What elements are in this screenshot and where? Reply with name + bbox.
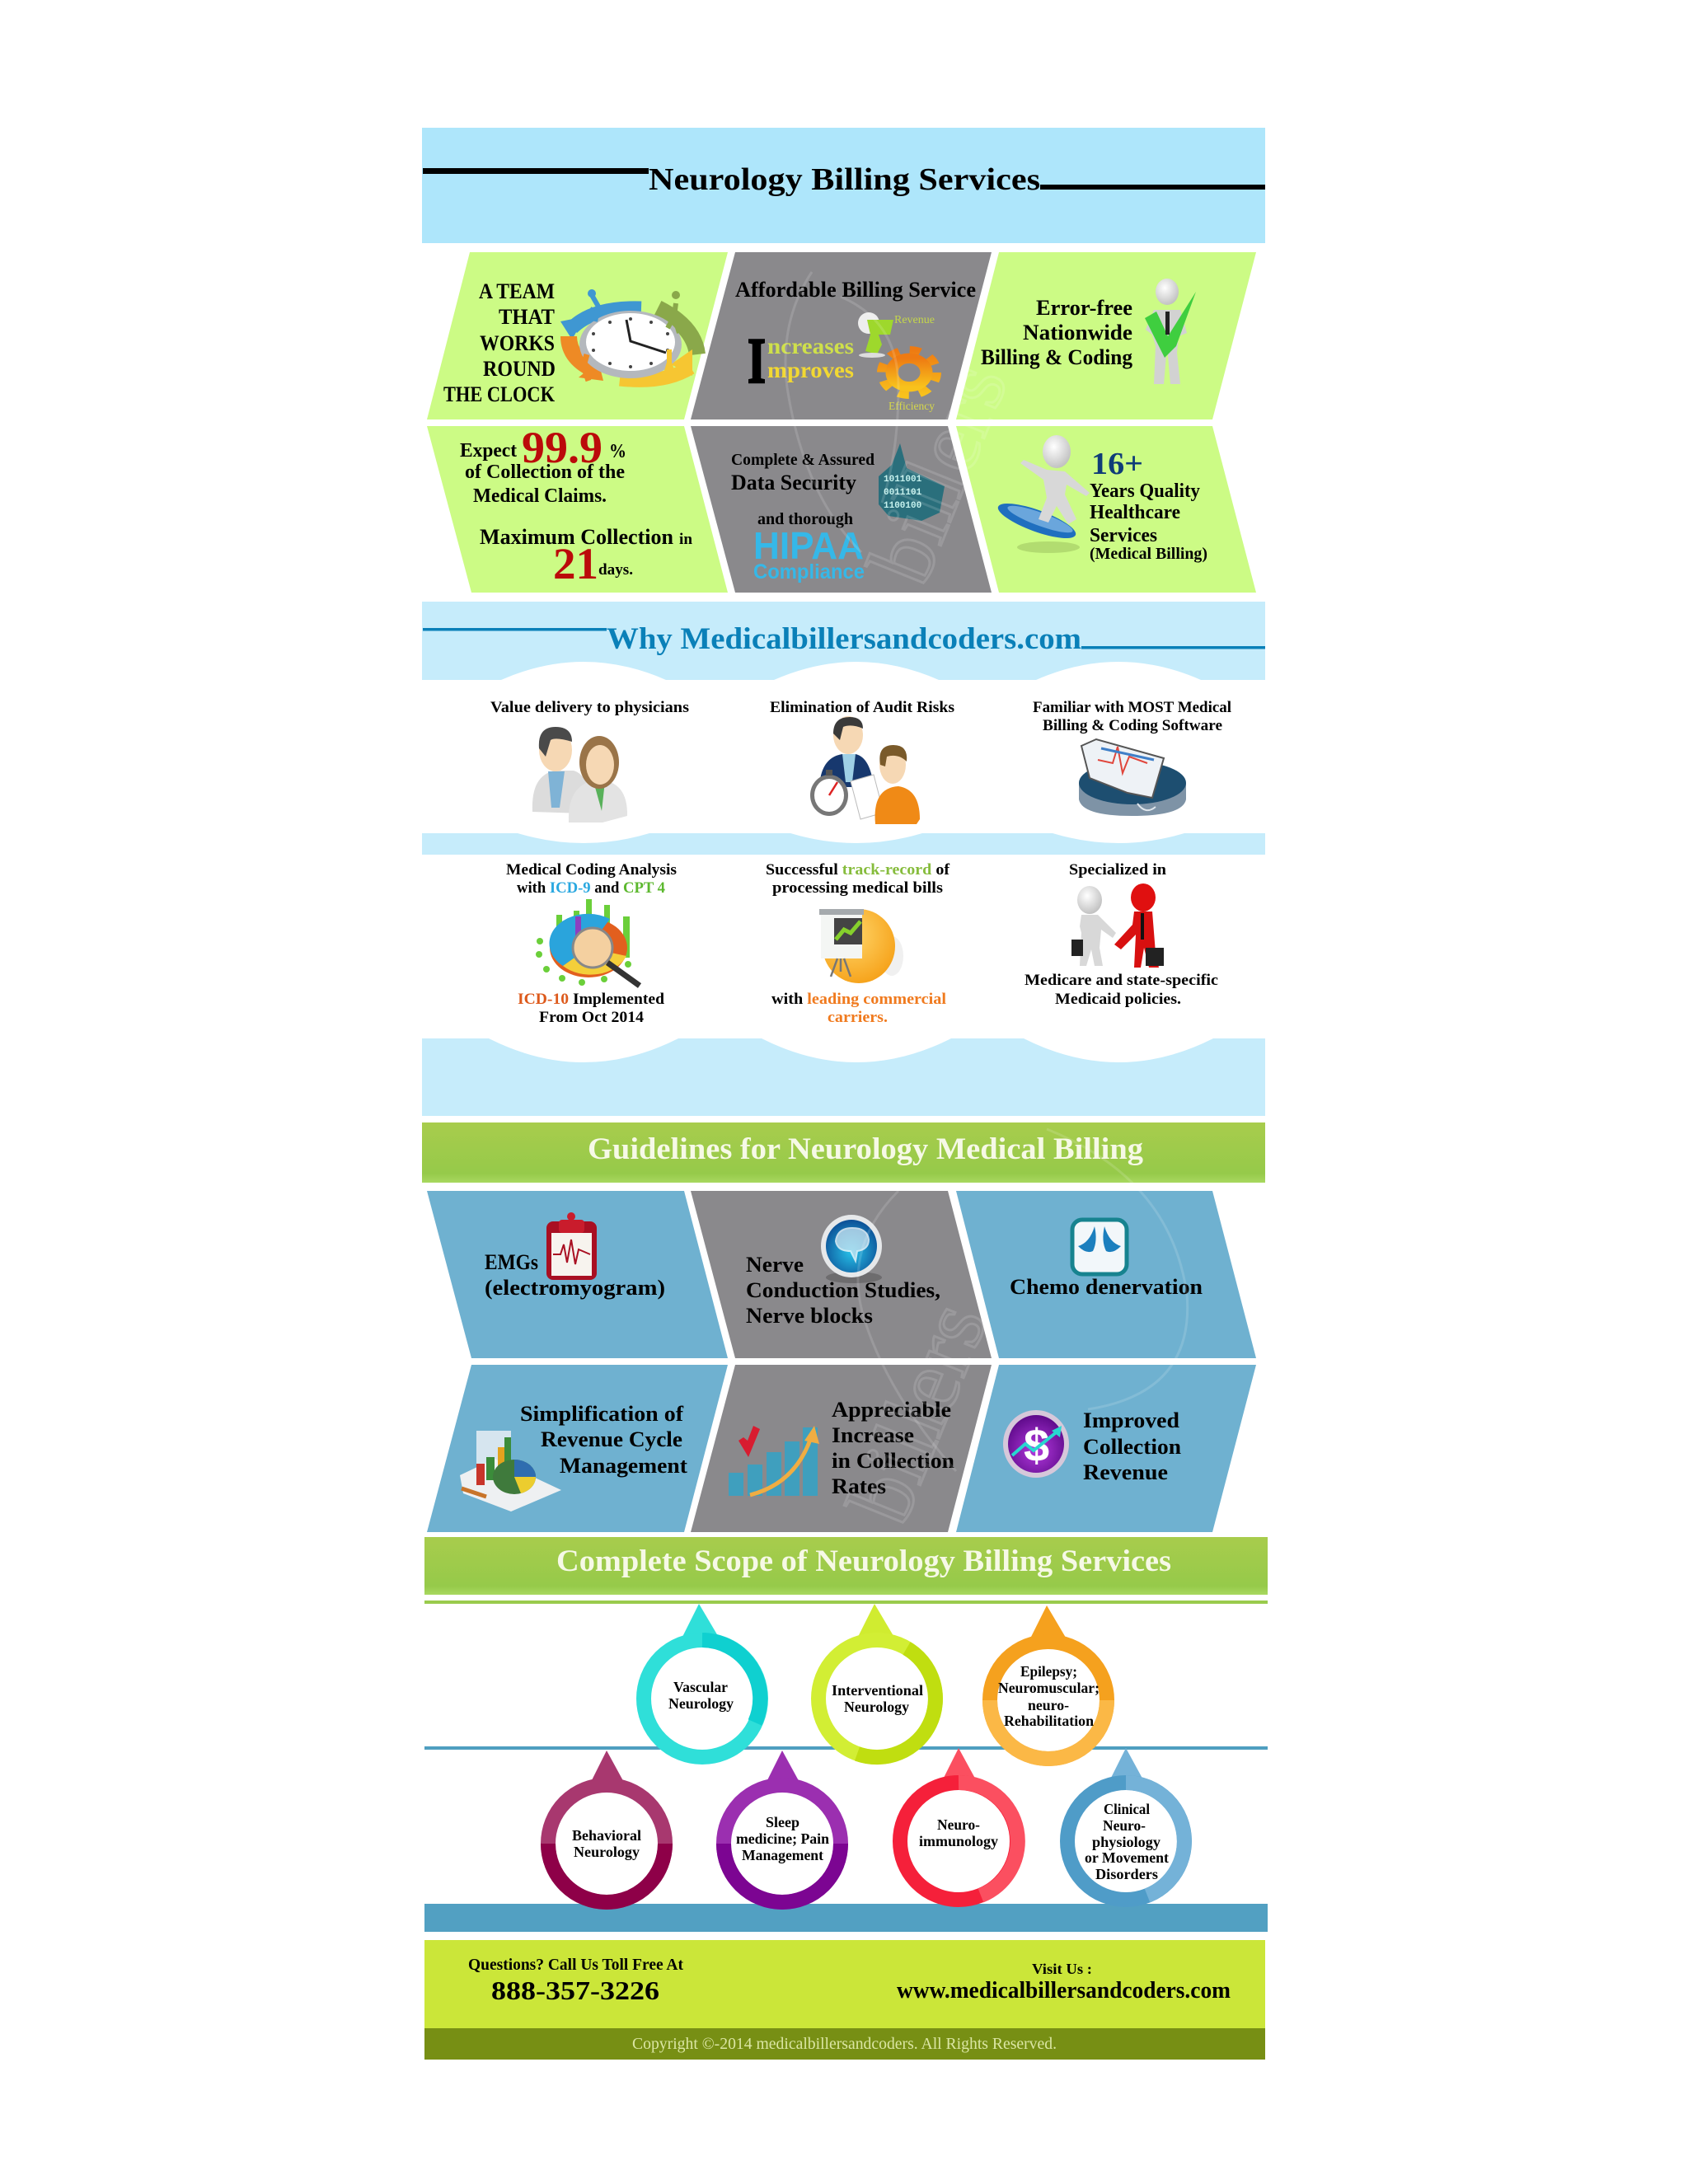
band: light blue lower scallop bbox=[422, 1038, 1265, 1116]
text: a team that works round the clock: ROUND bbox=[483, 357, 556, 381]
text: medical coding analysis icd-9 cpt 4 bbox=[506, 861, 677, 897]
text: expect 99.9 percent: % bbox=[609, 441, 626, 462]
text: increases improves: ncreases bbox=[767, 334, 854, 359]
label: Rehabilitation bbox=[1004, 1713, 1094, 1729]
heading: affordable billing service: Affordable Billing Service bbox=[735, 278, 976, 302]
heading: why medicalbillersandcoders.com: Why Medicalbillersandcoders.com bbox=[607, 622, 1081, 656]
icon: medical monitor on disk bbox=[1079, 739, 1186, 816]
text: with leading commercial carriers: with leading commercial bbox=[771, 991, 946, 1008]
text: HIPAA compliance: Compliance bbox=[753, 560, 865, 583]
text: appreciable increase: Appreciable bbox=[832, 1398, 951, 1422]
text: simplification of revenue cycle: Simplification of bbox=[520, 1402, 683, 1426]
text: specialized in: Specialized in bbox=[1069, 861, 1166, 879]
pin: vascular neurology bbox=[644, 1604, 761, 1757]
text: HIPAA compliance: HIPAA bbox=[753, 524, 864, 567]
pin: behavioral neurology bbox=[548, 1750, 665, 1902]
pin: neuro-immunology bbox=[900, 1748, 1018, 1900]
text: error-free nationwide billing and coding: Billing & Coding bbox=[981, 345, 1132, 369]
icon: rising bars with arrow bbox=[729, 1426, 819, 1496]
label bbox=[736, 1814, 829, 1863]
icon: purple dollar coin: $ bbox=[1024, 1419, 1049, 1471]
panel: nerve conduction studies bbox=[691, 1191, 992, 1358]
band: light blue divider bbox=[422, 833, 1265, 855]
label: immunology bbox=[919, 1833, 998, 1849]
text: questions call toll free: 888-357-3226 bbox=[491, 1975, 659, 2005]
panel: data security bbox=[691, 426, 992, 593]
panel: 99.9 percent collection bbox=[427, 423, 728, 593]
label: efficiency: Efficiency bbox=[889, 401, 935, 413]
blue base band bbox=[424, 1904, 1268, 1932]
label: Behavioral bbox=[572, 1827, 641, 1844]
text: a team that works round the clock: A TEAM bbox=[479, 279, 555, 303]
text: a team that works round the clock bbox=[443, 279, 556, 406]
text: 16+ years quality healthcare services: Services bbox=[1090, 525, 1157, 546]
text: emgs electromyogram: EMGs bbox=[485, 1250, 538, 1274]
panel: 16+ years quality bbox=[956, 426, 1256, 593]
icon: puzzle figure bbox=[858, 312, 893, 358]
label: or Movement bbox=[1085, 1849, 1169, 1866]
text: improved collection revenue bbox=[1083, 1408, 1182, 1484]
text: simplification of revenue cycle: Management bbox=[560, 1454, 687, 1478]
text: medicare and medicaid policies: Medicare and state-specific bbox=[1025, 972, 1218, 989]
text: nerve conduction studies, nerve blocks: Conduction Studies, bbox=[746, 1278, 940, 1302]
icon: binary thumb: 0011101 bbox=[884, 488, 922, 498]
label: Epilepsy; bbox=[1020, 1663, 1077, 1680]
label: Neurology bbox=[668, 1695, 734, 1712]
text: expect 99.9 percent: of Collection of the bbox=[465, 462, 625, 483]
text: questions call toll free: Questions? Call Us Toll Free At bbox=[468, 1956, 683, 1974]
text: expect 99.9 percent: Expect bbox=[460, 440, 517, 462]
icon: pie chart with magnifier bbox=[536, 899, 640, 986]
text: simplification of revenue cycle: Revenue Cycle bbox=[541, 1427, 682, 1451]
text: visit us website: Visit Us : bbox=[1032, 1961, 1092, 1977]
text: a team that works round the clock: THE CLOCK bbox=[443, 382, 556, 406]
text: familiar with most medical billing software bbox=[1033, 699, 1231, 734]
text: visit us website bbox=[897, 1961, 1231, 2004]
text: nerve conduction studies, nerve blocks: Nerve blocks bbox=[746, 1304, 873, 1328]
text: medical coding analysis icd-9 cpt 4: Medical Coding Analysis bbox=[506, 861, 677, 879]
text: maximum collection in 21 days bbox=[480, 525, 692, 588]
footer: contact bbox=[424, 1940, 1265, 2028]
panel: appreciable increase in collection rates bbox=[691, 1365, 992, 1532]
label: Neurology bbox=[574, 1844, 640, 1860]
label: revenue: Revenue bbox=[894, 314, 935, 326]
icon: figure with check mark bbox=[1145, 279, 1196, 384]
text: icd-10 implemented from oct 2014 bbox=[518, 991, 664, 1026]
text: maximum collection in 21 days: in bbox=[679, 531, 692, 548]
icon: binary thumb: 1100100 bbox=[884, 501, 921, 511]
banner: complete scope of neurology billing services bbox=[424, 1537, 1268, 1604]
icon: auditors with stopwatch bbox=[810, 716, 920, 824]
label bbox=[919, 1816, 998, 1849]
text: complete and assured data security: Complete & Assured bbox=[731, 451, 874, 469]
icon: presentation board on orange ball bbox=[819, 909, 903, 983]
icon: purple dollar coin bbox=[1003, 1410, 1069, 1478]
text: questions call toll free bbox=[468, 1956, 683, 2005]
section band: why medicalbillersandcoders bbox=[422, 602, 1265, 680]
text: medicare and medicaid policies bbox=[1025, 972, 1218, 1008]
icon: doctors bbox=[532, 727, 627, 823]
blue divider line bbox=[424, 1746, 1268, 1750]
text: appreciable increase: Increase bbox=[832, 1423, 914, 1447]
heading: Guidelines for Neurology Medical Billing bbox=[588, 1132, 1144, 1166]
text: emgs electromyogram: (electromyogram) bbox=[485, 1276, 665, 1300]
text: appreciable increase bbox=[832, 1398, 955, 1498]
text: 16+ years quality healthcare services: Years Quality bbox=[1090, 480, 1200, 502]
label: Neurology bbox=[844, 1699, 909, 1715]
text: maximum collection in 21 days: 21 bbox=[553, 539, 598, 588]
text: icd-10 implemented from oct 2014: ICD-10 Implemented bbox=[518, 991, 664, 1008]
label: Management bbox=[742, 1847, 823, 1863]
label: Sleep bbox=[766, 1814, 799, 1830]
text: increases improves: mproves bbox=[767, 358, 854, 382]
panel: error-free coding bbox=[956, 252, 1256, 419]
text: 16+ years quality healthcare services: Healthcare bbox=[1090, 502, 1180, 523]
text: expect 99.9 percent bbox=[460, 423, 626, 507]
text: maximum collection in 21 days: days. bbox=[598, 561, 633, 579]
text: error-free nationwide billing and coding bbox=[981, 296, 1132, 369]
text: 16+ years quality healthcare services bbox=[1090, 447, 1207, 563]
heading: Complete Scope of Neurology Billing Services bbox=[556, 1544, 1171, 1578]
text: medical coding analysis icd-9 cpt 4: with ICD-9 and CPT 4 bbox=[517, 879, 665, 897]
banner: guidelines for neurology medical billing bbox=[422, 1122, 1265, 1183]
text: a team that works round the clock: WORKS bbox=[480, 331, 555, 355]
label: Neuromuscular; bbox=[998, 1680, 1100, 1696]
text: error-free nationwide billing and coding: Error-free bbox=[1036, 296, 1132, 320]
label: Interventional bbox=[832, 1682, 923, 1699]
text: complete and assured data security bbox=[731, 451, 874, 528]
pin: clinical neurophysiology or movement disorders bbox=[1067, 1748, 1184, 1900]
pin: sleep medicine pain management bbox=[724, 1750, 841, 1902]
icon: clipboard with pulse bbox=[546, 1212, 597, 1280]
panel: EMGs bbox=[427, 1191, 728, 1358]
label: physiology bbox=[1092, 1834, 1160, 1850]
text: expect 99.9 percent: 99.9 bbox=[522, 423, 603, 472]
text: chemo denervation: Chemo denervation bbox=[1010, 1275, 1203, 1299]
icon: brain button bbox=[821, 1215, 882, 1283]
label: medicine; Pain bbox=[736, 1830, 829, 1847]
icon: surfer figure bbox=[995, 435, 1090, 553]
footer: copyright bar bbox=[424, 2028, 1265, 2060]
icon: binary thumb: 1011001 bbox=[884, 475, 922, 485]
text: familiar with most medical billing software: Familiar with MOST Medical bbox=[1033, 699, 1231, 716]
icon: binary thumb bbox=[879, 443, 945, 521]
panel: chemo denervation bbox=[956, 1191, 1256, 1358]
text: improved collection revenue: Collection bbox=[1083, 1435, 1182, 1459]
label bbox=[998, 1663, 1100, 1729]
text: value delivery to physicians: Value delivery to physicians bbox=[490, 699, 689, 716]
label bbox=[572, 1827, 641, 1860]
text: a team that works round the clock: THAT bbox=[499, 305, 555, 329]
panel: affordable billing service bbox=[691, 252, 992, 419]
panel: improved collection revenue bbox=[956, 1365, 1256, 1532]
label: Clinical bbox=[1104, 1801, 1150, 1817]
text: increases improves bbox=[748, 325, 854, 396]
text: successful track-record: processing medical bills bbox=[772, 879, 943, 897]
text: error-free nationwide billing and coding: Nationwide bbox=[1023, 321, 1132, 344]
text: simplification of revenue cycle bbox=[520, 1402, 687, 1478]
text: complete and assured data security: Data Security bbox=[731, 471, 856, 494]
text: icd-10 implemented from oct 2014: From Oct 2014 bbox=[539, 1009, 645, 1026]
label bbox=[832, 1682, 923, 1715]
text: nerve conduction studies, nerve blocks bbox=[746, 1253, 940, 1328]
text: expect 99.9 percent: Medical Claims. bbox=[473, 485, 607, 507]
label: Disorders bbox=[1095, 1866, 1158, 1882]
pin: epilepsy neuromuscular bbox=[990, 1605, 1107, 1759]
icon: clock with arrows bbox=[560, 289, 697, 381]
icon: gear bbox=[882, 350, 936, 395]
pin: interventional neurology bbox=[818, 1604, 935, 1757]
text: appreciable increase: in Collection bbox=[832, 1449, 955, 1473]
label: Neuro- bbox=[937, 1816, 980, 1833]
text: complete and assured data security: and thorough bbox=[757, 510, 853, 528]
label: neuro- bbox=[1028, 1697, 1069, 1713]
text: emgs electromyogram bbox=[485, 1250, 665, 1300]
copyright text: Copyright ©-2014 medicalbillersandcoders. All Rights Reserved. bbox=[632, 2035, 1057, 2053]
text: medicare and medicaid policies: Medicaid policies. bbox=[1055, 991, 1181, 1008]
text: increases improves: I bbox=[748, 325, 766, 396]
text: familiar with most medical billing software: Billing & Coding Software bbox=[1043, 717, 1222, 734]
text: elimination of audit risks: Elimination of Audit Risks bbox=[770, 699, 954, 716]
icon: handshake figures bbox=[1071, 883, 1164, 968]
label: Neuro- bbox=[1103, 1817, 1146, 1834]
icon: synapse square bbox=[1072, 1220, 1127, 1274]
text: nerve conduction studies, nerve blocks: Nerve bbox=[746, 1253, 804, 1277]
text: successful track-record: Successful track-record of bbox=[766, 861, 950, 879]
icon: charts on paper bbox=[460, 1431, 561, 1511]
label: Vascular bbox=[673, 1679, 728, 1695]
text: visit us website: www.medicalbillersandcoders.com bbox=[897, 1978, 1231, 2004]
text: with leading commercial carriers bbox=[771, 991, 946, 1026]
text: maximum collection in 21 days: Maximum Collection bbox=[480, 525, 674, 549]
text: 16+ years quality healthcare services: 16+ bbox=[1091, 447, 1143, 481]
text: successful track-record bbox=[766, 861, 950, 897]
text: improved collection revenue: Improved bbox=[1083, 1408, 1180, 1432]
text: with leading commercial carriers: carriers. bbox=[828, 1009, 888, 1026]
text: billers bbox=[828, 1288, 1006, 1536]
text: improved collection revenue: Revenue bbox=[1083, 1460, 1168, 1484]
text: 16+ years quality healthcare services: (Medical Billing) bbox=[1090, 545, 1207, 563]
panel: team round the clock bbox=[427, 252, 728, 419]
title: Neurology Billing Services bbox=[649, 162, 1040, 197]
panel: simplification of revenue cycle management bbox=[427, 1365, 728, 1532]
text: billers bbox=[848, 349, 1026, 597]
header band: Neurology Billing Services bbox=[422, 128, 1265, 243]
text: appreciable increase: Rates bbox=[832, 1474, 886, 1498]
label bbox=[668, 1679, 734, 1712]
label bbox=[1085, 1801, 1169, 1882]
